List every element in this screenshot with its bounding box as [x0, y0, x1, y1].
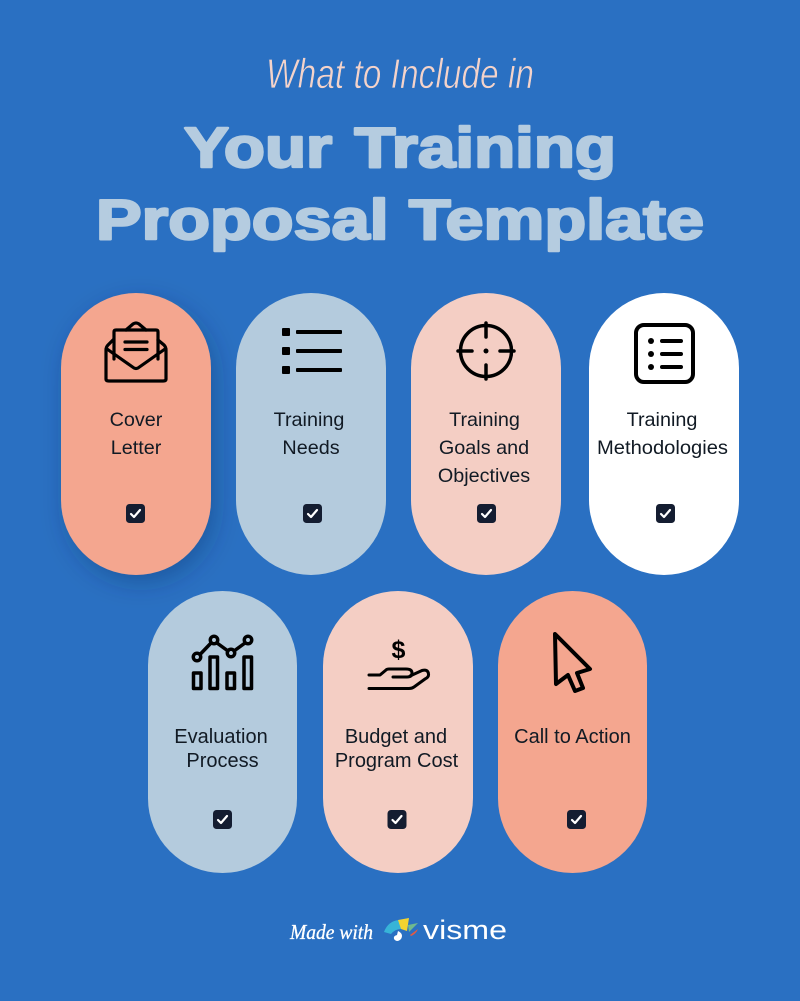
icon: cursor arrow [555, 634, 590, 691]
icon: visme logo [384, 918, 418, 941]
icon: checkbox [126, 504, 145, 523]
icon: bullet list [282, 328, 342, 374]
label: training needs: Needs [282, 437, 340, 459]
panel: cover letter [61, 293, 211, 575]
panel: call to action [498, 591, 647, 873]
icon: line and bar chart [193, 636, 252, 688]
made with text: Made with [289, 920, 373, 944]
footer: made with visme [289, 915, 507, 945]
icon: checkbox [388, 810, 406, 829]
panel: training methodologies [589, 293, 739, 575]
icon: checkbox [213, 810, 232, 829]
visme wordmark: visme [423, 915, 507, 945]
label: training goals and objectives: Goals and [439, 437, 529, 459]
label: training goals and objectives: Training [449, 409, 520, 431]
label: training goals and objectives: Objectives [438, 465, 530, 487]
label: training needs: Training [274, 409, 344, 431]
panel: evaluation process [148, 591, 297, 873]
icon: checkbox [477, 504, 496, 523]
icon: target [458, 323, 514, 379]
title [96, 116, 704, 252]
label: budget and program cost: Budget and [345, 726, 447, 748]
icon: framed list [636, 325, 693, 382]
icon: checkbox [567, 810, 586, 829]
label: training methodologies: Training [627, 409, 697, 431]
label: cover letter: Letter [111, 437, 162, 459]
label: evaluation process: Evaluation [174, 726, 268, 748]
label: cover letter: Cover [110, 409, 163, 431]
panel: budget and program cost [323, 591, 473, 873]
subtitle: What to Include in [266, 50, 534, 97]
icon: checkbox [656, 504, 675, 523]
label: evaluation process: Process [186, 750, 259, 772]
label: budget and program cost: Program Cost [335, 750, 459, 772]
label: call to action: Call to Action [514, 726, 631, 748]
panel: training needs [236, 293, 386, 575]
label: training methodologies: Methodologies [597, 437, 728, 459]
icon: hand with dollar [369, 636, 429, 688]
icon: checkbox [303, 504, 322, 523]
title: Your Training [184, 116, 616, 180]
icon: open envelope [106, 323, 166, 381]
icon: hand with dollar: $ [392, 636, 406, 664]
title: Proposal Template [96, 188, 704, 252]
panel: training goals and objectives [411, 293, 561, 575]
